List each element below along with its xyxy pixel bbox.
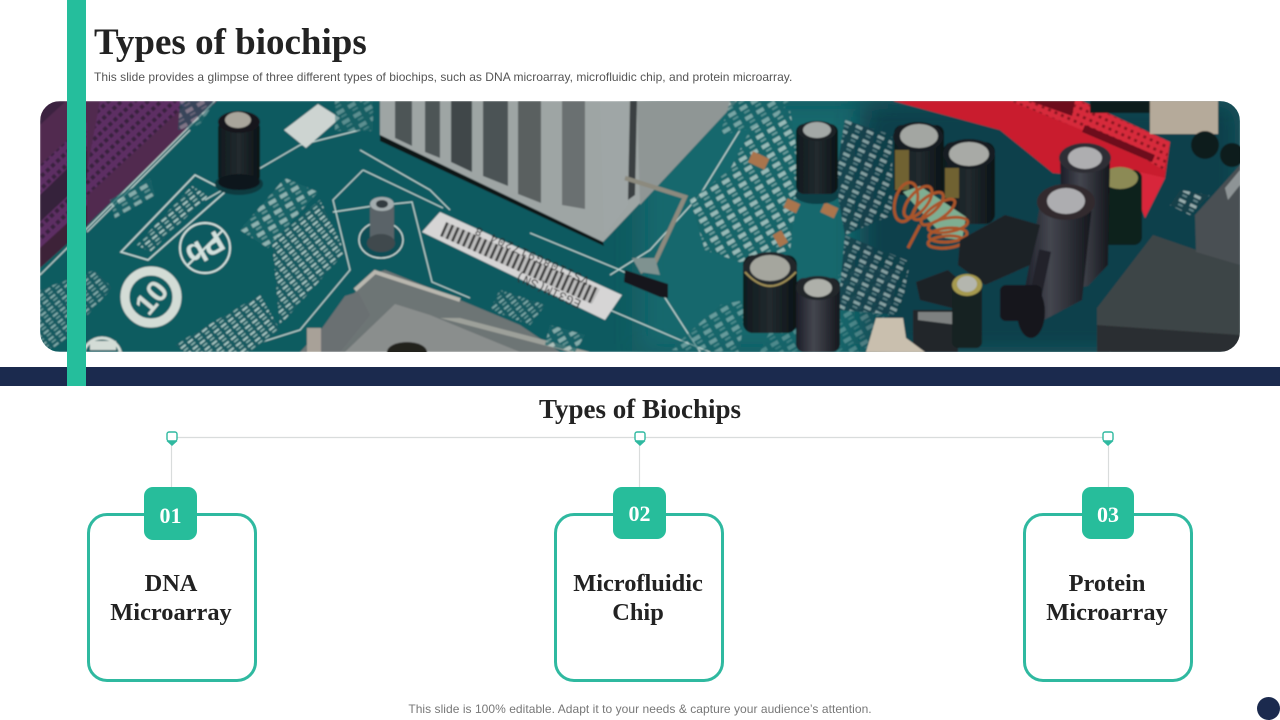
timeline connector (166, 431, 1114, 487)
purple memory slot (40, 101, 217, 268)
card label: Chip (612, 599, 664, 626)
timeline pin 1 (166, 432, 178, 446)
capacitors right top pair (893, 122, 995, 224)
title: Types of biochips (94, 22, 367, 63)
heatsink (380, 101, 737, 246)
section heading: Types of Biochips (539, 394, 741, 424)
footer note: This slide is 100% editable. Adapt it to your needs & capture your audience’s attention. (408, 702, 872, 716)
pb free symbol: Pb (180, 224, 230, 271)
card: Protein Microarray (1023, 513, 1193, 682)
capacitor center bottom pair (743, 252, 840, 352)
black capacitor left (215, 111, 263, 195)
number badge 01: 01 (160, 503, 182, 528)
card label: DNA (145, 570, 197, 597)
cpu socket lever (300, 270, 590, 362)
card label: Microarray (110, 599, 232, 626)
recycling 10 symbol: 10 (129, 275, 176, 321)
card label (110, 570, 232, 626)
capacitors right large group (1022, 143, 1142, 322)
board base (40, 101, 1240, 352)
silkscreen box: class labels (121, 175, 226, 260)
timeline pin 2 (634, 432, 646, 446)
number badge 02: 02 (628, 501, 650, 526)
subtitle: This slide provides a glimpse of three different types of biochips, such as DNA microarray, microfluidic chip, and protein microarray. (94, 70, 792, 84)
beige block bottom (866, 318, 925, 352)
capacitor center top (795, 121, 839, 204)
silk pad clusters left (40, 101, 373, 352)
small e symbol (83, 338, 121, 376)
card label: Microfluidic (573, 570, 703, 597)
small gold capacitor (952, 274, 982, 348)
barcode label (422, 212, 622, 320)
card label (573, 570, 703, 626)
barcode label: EG31M(SN) (514, 268, 584, 311)
card: Microfluidic Chip (554, 513, 724, 682)
card: DNA Microarray (87, 513, 257, 682)
bent wire jumper (625, 178, 685, 272)
photo: circuit board banner (40, 101, 1240, 352)
card label: Microarray (1046, 599, 1168, 626)
red expansion slot (893, 101, 1170, 218)
number badge 03: 03 (1097, 502, 1119, 527)
silk pads center (490, 101, 910, 352)
silkscreen traces (40, 101, 1200, 352)
number badge 02 (613, 487, 666, 539)
card label (1046, 570, 1168, 626)
dark connector right (1097, 165, 1240, 352)
small dark transistor and chips (913, 215, 1045, 352)
green vertical accent bar (67, 0, 86, 386)
copper inductor (890, 180, 969, 250)
timeline pin 3 (1102, 432, 1114, 446)
navy page circle (1257, 697, 1280, 720)
jumper header (624, 258, 668, 298)
navy horizontal band (0, 367, 1280, 386)
number badge 01 (144, 487, 197, 540)
card label: Protein (1069, 570, 1145, 597)
top right components (1090, 101, 1244, 215)
number badge 03 (1082, 487, 1134, 539)
barcode label: VS1108G917204 8 (473, 223, 592, 287)
metal standoff (359, 197, 403, 258)
